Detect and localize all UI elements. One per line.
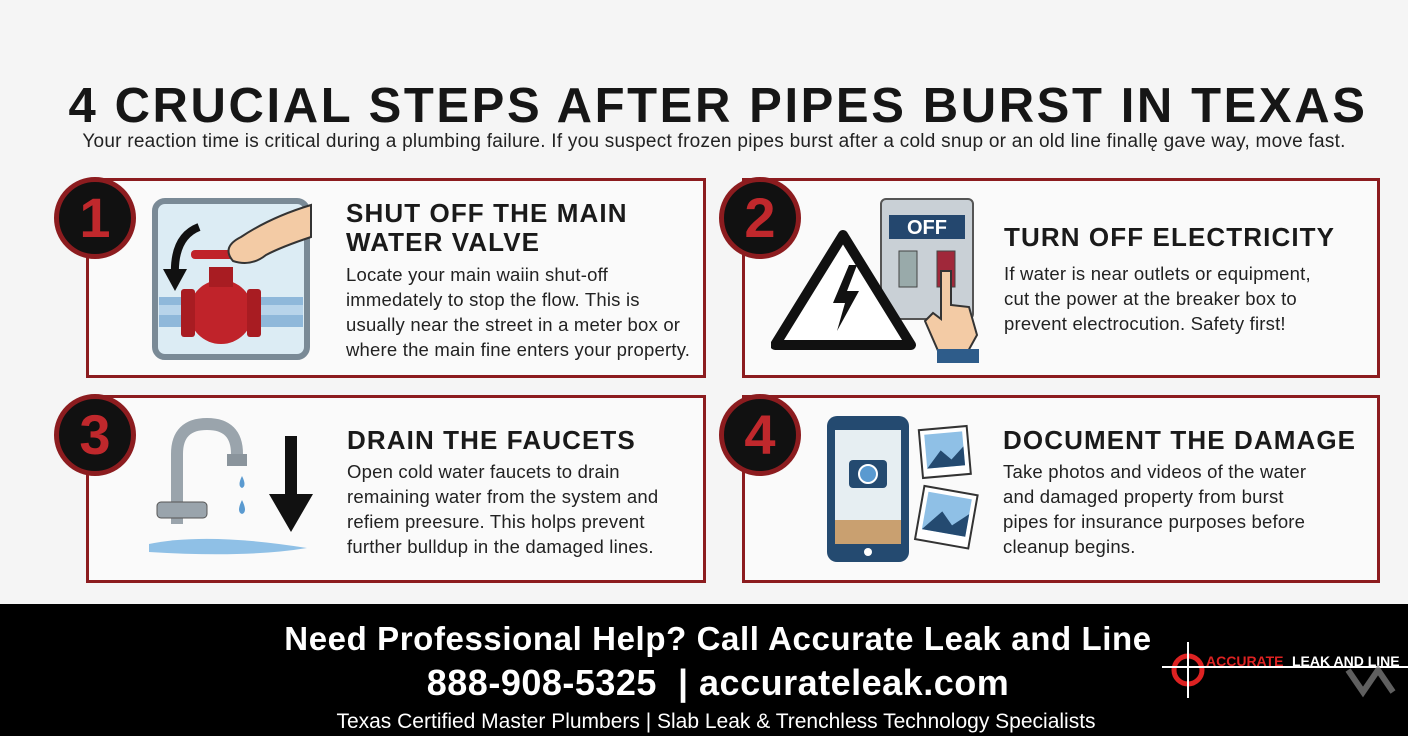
body text (347, 461, 658, 557)
badge 3: 3 (79, 403, 111, 466)
icon: warning and breaker (771, 198, 979, 363)
panel: step 3 (86, 395, 706, 583)
body text: Open cold water faucets to drain (347, 461, 620, 482)
body text: refiem preesure. This holps prevent (347, 511, 645, 532)
body text: Take photos and videos of the water (1003, 461, 1306, 482)
body text: and damaged property from burst (1003, 486, 1284, 507)
panel: step 1 (86, 178, 706, 378)
badge 4: 4 (744, 403, 776, 466)
body text: immedately to stop the flow. This is (346, 289, 640, 310)
body text: Locate your main waiin shut-off (346, 264, 608, 285)
badge 4 (719, 394, 801, 476)
body text: pipes for insurance purposes before (1003, 511, 1305, 532)
body text: usually near the street in a meter box or (346, 314, 680, 335)
icon: warning and breaker: OFF (907, 217, 947, 239)
panel: step 2 (742, 178, 1380, 378)
body text: remaining water from the system and (347, 486, 658, 507)
heading: TURN OFF ELECTRICITY (1004, 222, 1335, 252)
title: 4 CRUCIAL STEPS AFTER PIPES BURST IN TEXAS (68, 79, 1367, 133)
badge 1: 1 (79, 186, 111, 249)
heading (346, 198, 628, 257)
body text (1004, 263, 1311, 334)
badge 2 (719, 177, 801, 259)
badge 3 (54, 394, 136, 476)
body text: further bulldup in the damaged lines. (347, 536, 654, 557)
body text (346, 264, 690, 360)
body text: If water is near outlets or equipment, (1004, 263, 1311, 284)
heading: SHUT OFF THE MAIN (346, 198, 628, 228)
icon: faucet (149, 418, 313, 554)
footer call to action: Need Professional Help? Call Accurate Leak and Line (284, 620, 1152, 657)
icon: phone and photos (827, 416, 979, 562)
heading: DRAIN THE FAUCETS (347, 425, 636, 455)
panel: step 4 (742, 395, 1380, 583)
body text: cleanup begins. (1003, 536, 1136, 557)
footer tagline: Texas Certified Master Plumbers | Slab Leak & Trenchless Technology Specialists (336, 710, 1096, 733)
body text: prevent electrocution. Safety first! (1004, 313, 1286, 334)
body text (1003, 461, 1306, 557)
subtitle: Your reaction time is critical during a plumbing failure. If you suspect frozen pipes burst after a cold snup or an old line finallę gave way, move fast. (82, 131, 1346, 152)
logo: LEAK AND LINE (1292, 653, 1400, 669)
heading: WATER VALVE (346, 227, 540, 257)
heading: DOCUMENT THE DAMAGE (1003, 425, 1356, 455)
badge 2: 2 (744, 186, 776, 249)
footer banner (0, 604, 1408, 736)
logo: ACCURATE (1206, 653, 1284, 669)
body text: cut the power at the breaker box to (1004, 288, 1297, 309)
footer contact: 888-908-5325 | accurateleak.com (427, 662, 1009, 703)
logo (1162, 642, 1408, 698)
body text: where the main fine enters your property. (346, 339, 690, 360)
icon: valve (152, 198, 312, 360)
badge 1 (54, 177, 136, 259)
